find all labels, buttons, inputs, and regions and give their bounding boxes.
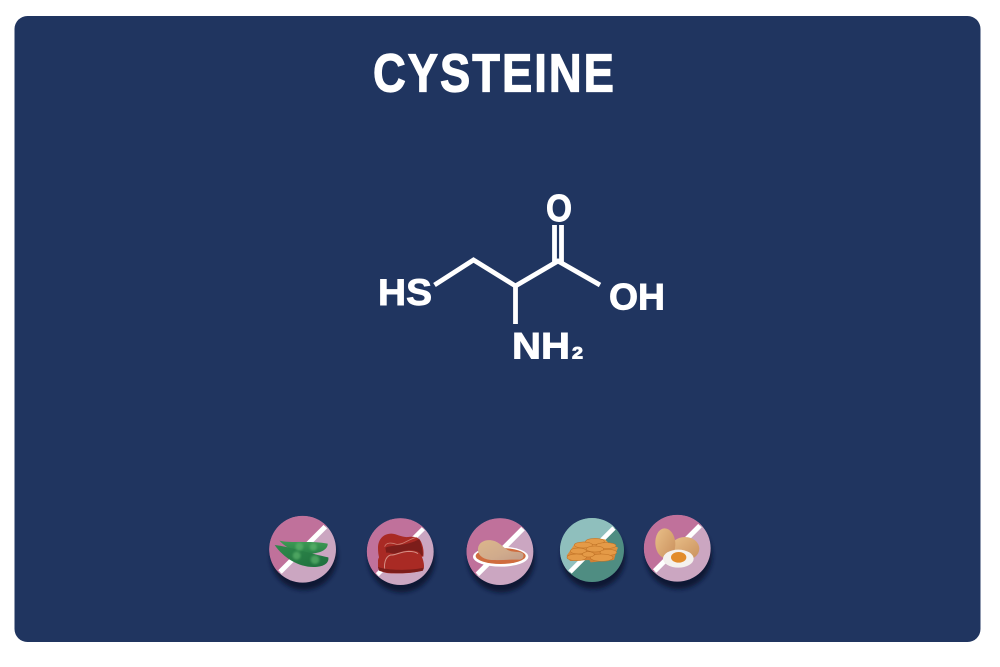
molecule bonds	[434, 225, 600, 324]
icon: chicken drumstick on plate	[467, 518, 535, 592]
icon: eggs	[644, 515, 712, 589]
icon: edamame beans	[269, 516, 337, 590]
atom label: NH2: NH	[512, 326, 570, 366]
icon: fish fillets	[560, 518, 625, 589]
subscript 2: 2	[572, 344, 583, 362]
icon: red meat	[367, 518, 435, 592]
icon row: food sources	[269, 515, 712, 592]
chemical structure: cysteine	[378, 188, 665, 366]
title: CYSTEINE	[373, 43, 616, 103]
atom label: HS: HS	[378, 272, 432, 313]
atom label: OH: OH	[609, 276, 665, 318]
atom label: O: O	[546, 188, 572, 230]
